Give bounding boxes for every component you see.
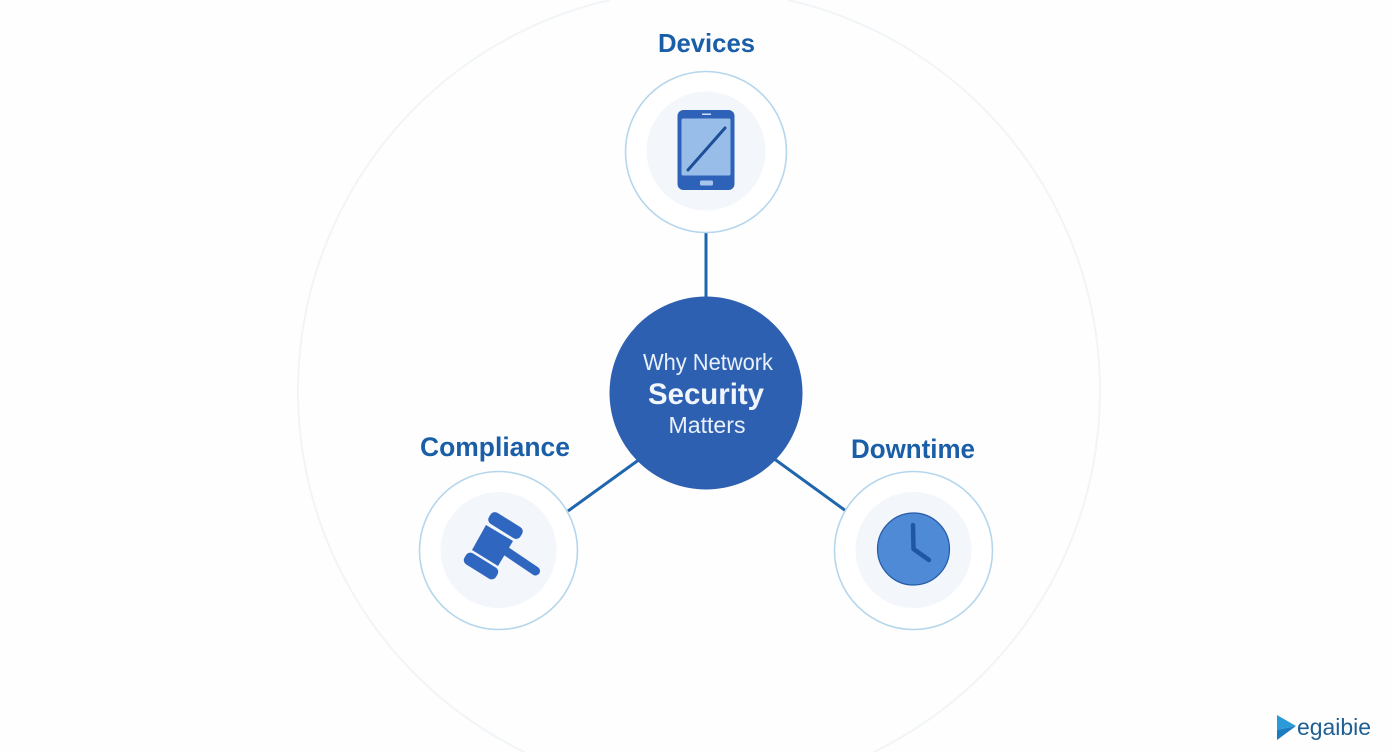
hub text: matters: Matters [668,412,746,438]
devices ring [626,72,786,232]
compliance ring [420,472,578,630]
heading: compliance: Compliance [420,432,570,462]
connector: hub to downtime [773,458,846,511]
heading: downtime: Downtime [851,434,975,464]
icon: gavel [462,510,536,581]
connector: hub to compliance [568,459,640,511]
icon: tablet [678,110,734,190]
devices inner disc [646,92,766,210]
compliance inner disc [440,492,556,608]
central hub [610,296,802,490]
node: devices [626,28,786,232]
logo [1277,714,1371,740]
outer faint ring [298,0,1100,752]
logo wordmark: egaibie [1297,714,1371,740]
icon: clock [878,513,950,585]
hub text: security: Security [648,378,764,411]
heading: devices: Devices [658,28,755,58]
connector: hub to devices [704,232,708,300]
node: compliance [420,432,578,630]
hub text: why network: Why Network [643,349,773,375]
node: downtime [834,434,992,630]
logo mark [1277,715,1296,740]
downtime ring [834,472,992,630]
downtime inner disc [856,492,972,608]
